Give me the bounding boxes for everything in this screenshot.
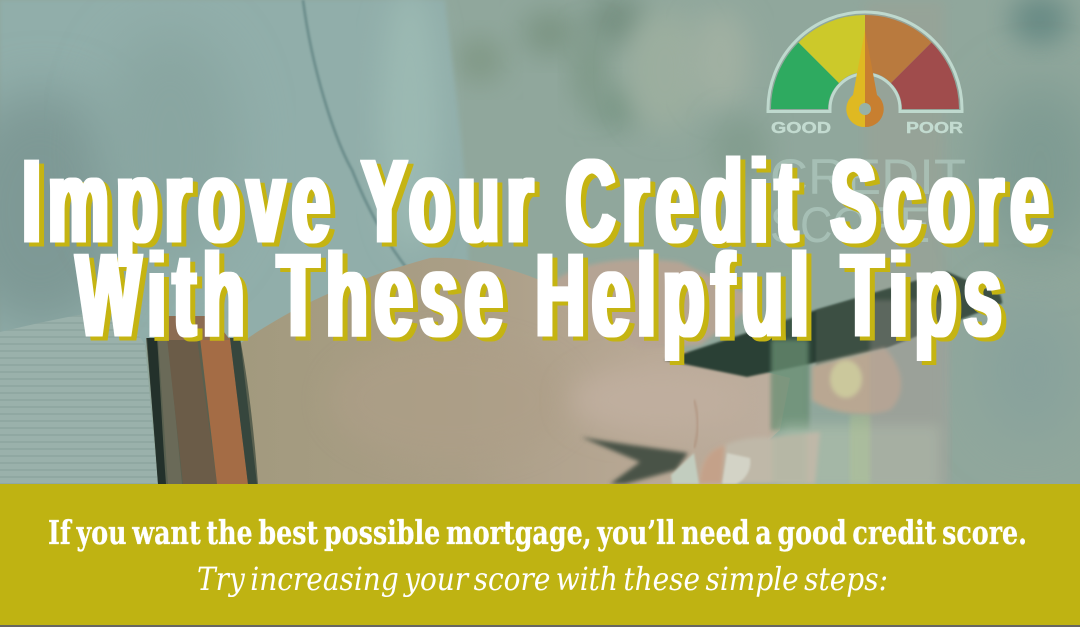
title: white text: Improve Your Credit Score xyxy=(22,134,1049,268)
gauge: green segment xyxy=(771,42,839,109)
gauge: outline xyxy=(768,12,962,112)
gauge: CREDIT faint text: CREDIT xyxy=(770,149,966,205)
title: shadow xyxy=(27,138,1054,366)
photo: blurred backdrop xyxy=(0,0,1080,484)
photo: finger crease and shadow xyxy=(581,400,698,484)
gauge: needle xyxy=(846,30,884,127)
photo: fingertip near phone xyxy=(812,348,901,414)
gauge: orange segment xyxy=(865,15,932,83)
title: shadow: Improve Your Credit Score xyxy=(27,138,1054,272)
photo: phone xyxy=(664,272,1002,430)
photo: hand xyxy=(238,258,790,484)
gauge: yellow segment xyxy=(798,15,865,83)
gauge: POOR label: POOR xyxy=(906,120,964,137)
title: shadow: With These Helpful Tips xyxy=(81,232,1007,366)
photo: lower finger xyxy=(671,425,940,490)
photo: leather bracelets xyxy=(146,316,258,484)
credit gauge icon xyxy=(768,12,966,253)
gauge: red segment xyxy=(891,42,959,109)
photo: glitch streaks xyxy=(772,298,942,481)
background photo: hand holding phone xyxy=(0,0,1080,490)
gauge: SCORE faint text: SCORE xyxy=(770,197,930,253)
panel: intro band xyxy=(0,484,1080,627)
title: white text xyxy=(22,134,1049,362)
gauge: GOOD label: GOOD xyxy=(771,120,831,137)
photo: sweater cuff xyxy=(0,314,158,484)
title xyxy=(22,134,1054,366)
intro subheading: Try increasing your score with these simple steps: xyxy=(197,560,888,598)
photo: sweater xyxy=(0,0,470,345)
title: white text: With These Helpful Tips xyxy=(76,228,1002,362)
